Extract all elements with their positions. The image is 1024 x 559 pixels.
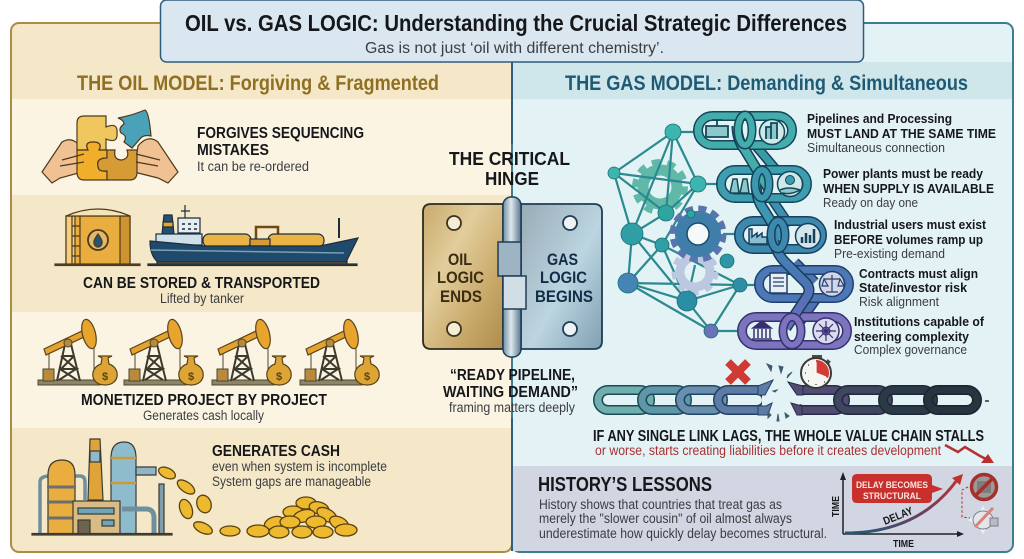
text: pipelines and processing [807, 111, 996, 155]
hinge: gas leaf: GAS [547, 251, 578, 269]
text: generates cash: System gaps are manageable [212, 474, 371, 489]
hinge: oil leaf: LOGIC [437, 269, 484, 287]
text: can be stored and transported: Lifted by tanker [160, 291, 244, 306]
panel: oil model [11, 23, 512, 552]
heading: the critical hinge [449, 148, 570, 189]
text: industrial users: Industrial users must exist [834, 217, 987, 232]
hinge: gas leaf: BEGINS [535, 288, 593, 306]
text: forgives sequencing: FORGIVES SEQUENCING [197, 125, 364, 142]
text: institutions [854, 314, 985, 357]
network nodes [608, 124, 747, 338]
panel: gas model [511, 23, 1013, 552]
icon: broken pipe [962, 487, 999, 534]
icon: hands and puzzle pieces [42, 110, 178, 183]
icon: prohibited plant [972, 474, 996, 500]
title: OIL vs. GAS LOGIC: Understanding the Crucial Strategic Differences [185, 10, 847, 36]
gear: teal [636, 163, 684, 211]
chart curve [845, 480, 957, 533]
heading: the critical hinge: HINGE [485, 168, 539, 189]
icon: coin pile [247, 497, 357, 538]
text: institutions: Complex governance [854, 343, 967, 357]
text: monetized project by project: Generates cash locally [143, 408, 264, 423]
heading: oil model: THE OIL MODEL: Forgiving & Fragmented [77, 71, 439, 95]
text: ready pipeline quote: “READY PIPELINE, [450, 367, 575, 384]
text: can be stored and transported [83, 275, 320, 306]
text: institutions: Institutions capable of [854, 314, 985, 329]
icon: falling gold coins [157, 465, 240, 537]
text: pipelines and processing: MUST LAND AT THE SAME TIME [807, 126, 996, 141]
text: industrial users: BEFORE volumes ramp up [834, 232, 983, 247]
hinge: oil leaf [423, 204, 503, 349]
hinge: barrel [498, 197, 526, 357]
text: institutions: steering complexity [854, 329, 970, 344]
text: industrial users [834, 217, 987, 261]
text: forgives sequencing: MISTAKES [197, 142, 269, 159]
callout: delay becomes structural: DELAY BECOMES [856, 480, 928, 491]
text: pipelines and processing: Simultaneous connection [807, 141, 945, 155]
hinge: gas leaf: LOGIC [540, 269, 587, 287]
link 5: institutions [742, 317, 847, 345]
text: generates cash: GENERATES CASH [212, 443, 340, 460]
text: ready pipeline quote: WAITING DEMAND” [443, 384, 578, 401]
text: ready pipeline quote [443, 367, 578, 415]
callout: delay becomes structural [852, 474, 943, 503]
icon: tanker ship [148, 205, 358, 266]
text: contracts [859, 266, 978, 309]
text: forgives sequencing [197, 125, 364, 174]
panel: history lessons text: History shows that countries that treat gas as [539, 497, 782, 512]
hinge: oil leaf: ENDS [440, 288, 482, 306]
panel: history lessons text [538, 474, 827, 541]
text: contracts: Contracts must align [859, 266, 978, 281]
front bands and rings [737, 115, 809, 345]
chart: delay curve: TIME [893, 538, 914, 550]
text: power plants [823, 166, 994, 210]
title box [160, 0, 864, 62]
text: contracts: State/investor risk [859, 280, 968, 295]
gear: pale [675, 252, 715, 292]
icon: storage tank [55, 209, 140, 266]
link 3: industrial users [739, 221, 822, 249]
diagram: broken chain [598, 364, 989, 421]
text: generates cash [212, 443, 387, 489]
link 1: pipelines [698, 116, 792, 145]
text: generates cash: even when system is incomplete [212, 459, 387, 474]
diagram: interlocked chain links [698, 115, 849, 345]
gear: blue [673, 209, 723, 259]
icon: pump jacks with money bags [38, 318, 379, 385]
text: power plants: WHEN SUPPLY IS AVAILABLE [823, 181, 994, 196]
network edges [614, 132, 755, 331]
text: monetized project by project [81, 392, 327, 423]
text: chain warning [593, 428, 984, 458]
chart: delay curve: DELAY [882, 505, 915, 528]
link 2: power plants [721, 170, 807, 198]
text: forgives sequencing: It can be re-ordered [197, 159, 309, 174]
link 4: contracts [759, 270, 849, 298]
heading: the critical hinge: THE CRITICAL [449, 148, 570, 169]
chart: delay curve [830, 472, 964, 550]
icon: refinery [32, 439, 172, 535]
hinge: gas leaf [521, 204, 602, 349]
back bands [756, 146, 817, 322]
arrow: decline [945, 445, 994, 463]
text: power plants: Power plants must be ready [823, 166, 984, 181]
text: chain warning: or worse, starts creating liabilities before it creates development [595, 443, 941, 458]
hinge: oil leaf: OIL [448, 251, 472, 269]
text: ready pipeline quote: framing matters deeply [449, 400, 575, 415]
icon: stopwatch [801, 355, 831, 388]
chain break gap [762, 378, 803, 420]
text: contracts: Risk alignment [859, 295, 940, 309]
text: can be stored and transported: CAN BE STORED & TRANSPORTED [83, 275, 320, 292]
diagram: network of nodes [608, 124, 755, 338]
chart: delay curve: TIME [830, 496, 842, 517]
chart axes [840, 472, 964, 537]
text: monetized project by project: MONETIZED PROJECT BY PROJECT [81, 392, 327, 409]
text: pipelines and processing: Pipelines and Processing [807, 111, 952, 126]
panel: history lessons text: HISTORY’S LESSONS [538, 474, 712, 496]
icon: red x [728, 362, 748, 382]
panel: history lessons text: merely the "slower cousin" of oil almost always [539, 511, 792, 526]
subtitle: Gas is not just ‘oil with different chemistry’. [365, 40, 664, 57]
text: power plants: Ready on day one [823, 196, 918, 210]
icon: hinge [423, 197, 602, 357]
text: industrial users: Pre-existing demand [834, 247, 945, 261]
panel: history lessons text: underestimate how quickly delay becomes structural. [539, 526, 827, 541]
callout: delay becomes structural: STRUCTURAL [863, 491, 921, 502]
